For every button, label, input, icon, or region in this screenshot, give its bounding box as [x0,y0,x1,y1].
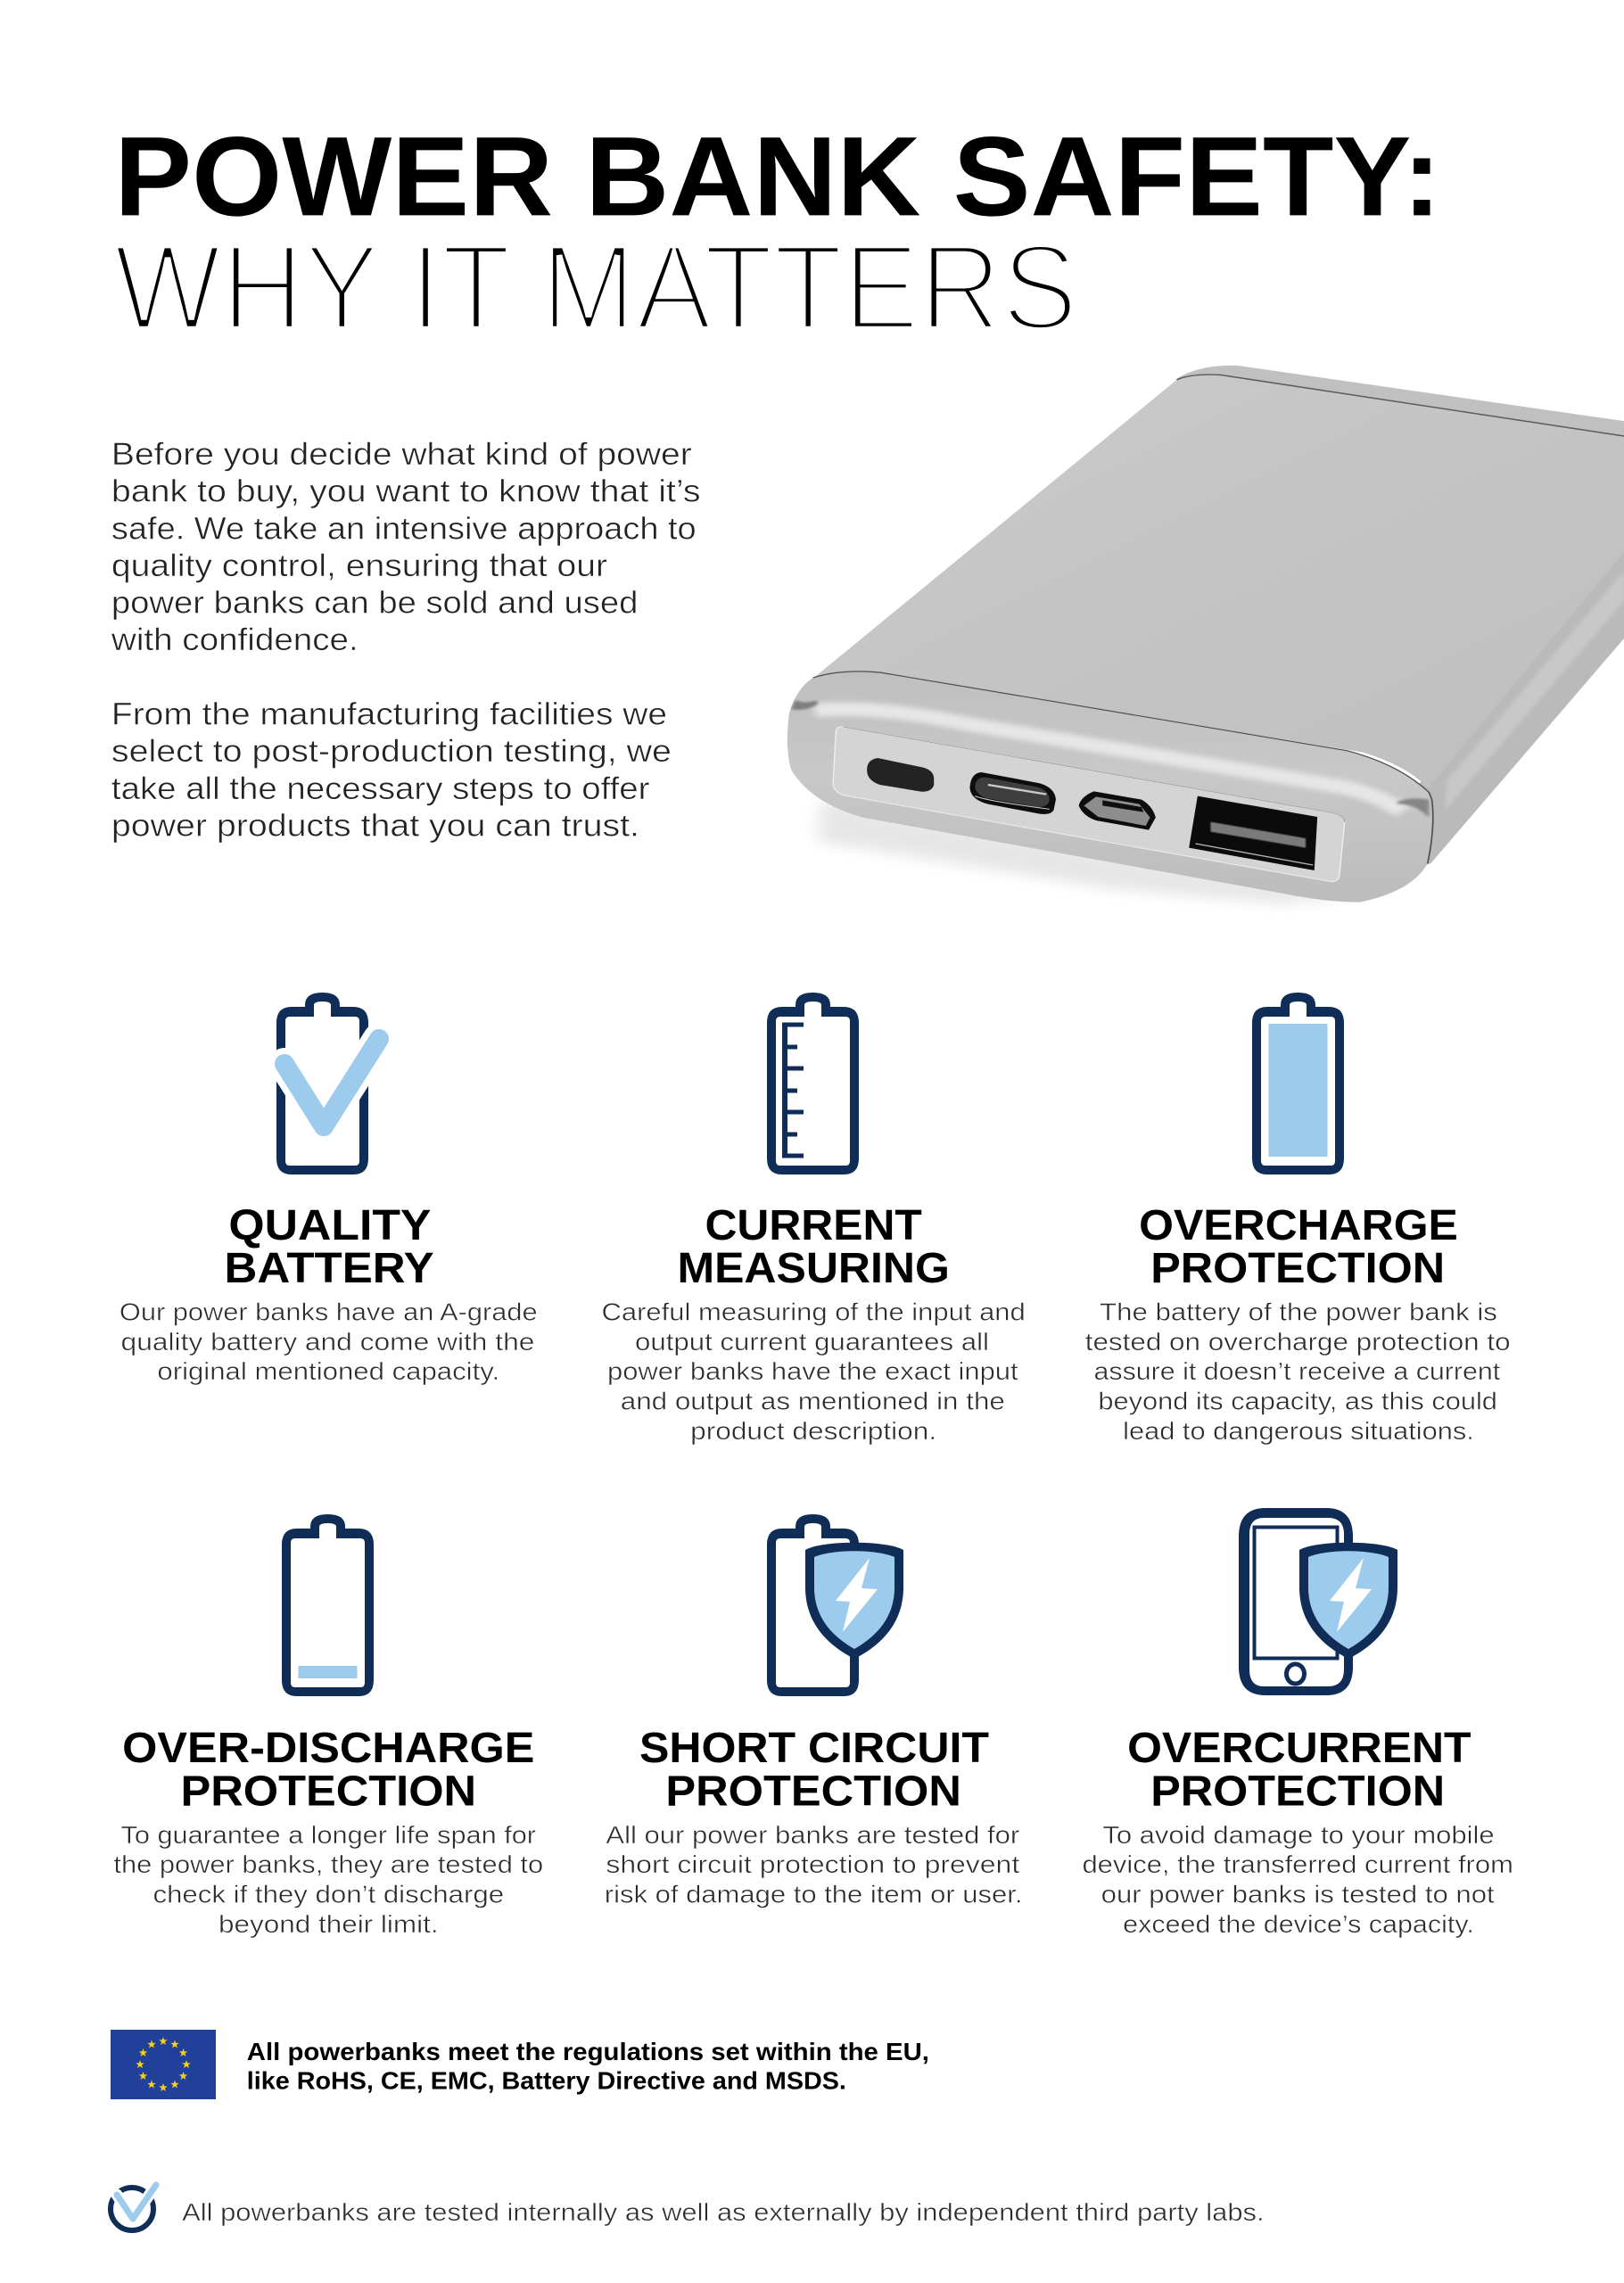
description: beyond their limit. [218,1910,439,1938]
description: beyond its capacity, as this could [1098,1387,1497,1414]
heading: PROTECTION [181,1768,476,1816]
title: WHY IT MATTERS [113,219,1078,356]
description: To avoid damage to your mobile [1102,1821,1495,1849]
description: lead to dangerous situations. [1123,1417,1474,1445]
icon: battery with shield [767,1514,903,1696]
heading: OVERCURRENT [1127,1724,1471,1772]
panel: overcurrent protection [1082,1508,1513,1938]
EU regulations text: All powerbanks meet the regulations set within the EU, [247,2038,929,2065]
description: All our power banks are tested for [606,1821,1019,1849]
heading: OVER-DISCHARGE [122,1724,534,1772]
description: To guarantee a longer life span for [121,1821,536,1849]
description: tested on overcharge protection to [1085,1328,1511,1356]
icon: circle check [111,2185,156,2230]
icon: phone with shield [1239,1508,1397,1695]
description: and output as mentioned in the [621,1387,1005,1414]
heading [677,1201,950,1292]
icon: EU flag [111,2030,216,2099]
intro text block: safe. We take an intensive approach to [111,511,697,546]
panel: quality battery [120,993,538,1385]
description [120,1298,538,1385]
description: short circuit protection to prevent [606,1850,1020,1878]
panel: overcharge protection [1085,993,1511,1445]
third party testing text: All powerbanks are tested internally as well as externally by independent third party labs. [182,2198,1265,2226]
description: output current guarantees all [635,1328,989,1356]
panel: over-discharge protection [113,1514,543,1938]
heading [1127,1724,1471,1816]
description: assure it doesn’t receive a current [1094,1357,1501,1385]
description [1082,1821,1513,1938]
description [605,1821,1023,1908]
description: The battery of the power bank is [1100,1298,1497,1325]
heading: SHORT CIRCUIT [639,1724,989,1772]
icon: full battery [1252,993,1344,1174]
heading: PROTECTION [665,1768,961,1816]
icon: battery with check [276,993,379,1174]
panel: current measuring [602,993,1026,1445]
description: the power banks, they are tested to [113,1850,543,1878]
heading: CURRENT [705,1201,922,1249]
description: power banks have the exact input [607,1357,1018,1385]
description: risk of damage to the item or user. [605,1880,1023,1908]
heading [122,1724,534,1816]
heading [225,1201,434,1292]
intro text block: take all the necessary steps to offer [111,771,650,806]
intro text block: quality control, ensuring that our [111,548,607,583]
title: POWER BANK SAFETY: [114,112,1441,239]
description: Our power banks have an A-grade [120,1298,538,1325]
icon: battery with measuring scale [767,993,859,1174]
description: device, the transferred current from [1082,1850,1513,1878]
description: original mentioned capacity. [157,1357,499,1385]
intro text block: From the manufacturing facilities we [111,697,667,732]
EU regulations text: like RoHS, CE, EMC, Battery Directive and MSDS. [247,2067,846,2095]
intro text block [111,437,701,843]
intro text block: with confidence. [111,622,359,657]
panel: short circuit protection [605,1514,1023,1908]
heading [639,1724,989,1816]
heading [1139,1201,1458,1292]
heading: PROTECTION [1150,1768,1445,1816]
power bank product image [787,366,1624,903]
description: quality battery and come with the [121,1328,534,1356]
EU regulations text [247,2038,929,2095]
heading: OVERCHARGE [1139,1201,1458,1249]
title [113,112,1441,356]
description [113,1821,543,1938]
intro text block: power products that you can trust. [111,808,639,843]
heading: PROTECTION [1150,1244,1445,1292]
description: Careful measuring of the input and [602,1298,1026,1325]
description: our power banks is tested to not [1101,1880,1495,1908]
intro text block: Before you decide what kind of power [111,437,692,472]
icon: low battery [282,1514,374,1696]
heading: BATTERY [225,1244,434,1292]
description: exceed the device’s capacity. [1123,1910,1474,1938]
heading: MEASURING [677,1244,950,1292]
description: product description. [690,1417,936,1445]
intro text block: select to post-production testing, we [111,734,672,769]
heading: QUALITY [228,1201,431,1249]
intro text block: bank to buy, you want to know that it’s [111,474,701,509]
intro text block: power banks can be sold and used [111,586,638,621]
description [1085,1298,1511,1445]
description [602,1298,1026,1445]
description: check if they don’t discharge [153,1880,504,1908]
